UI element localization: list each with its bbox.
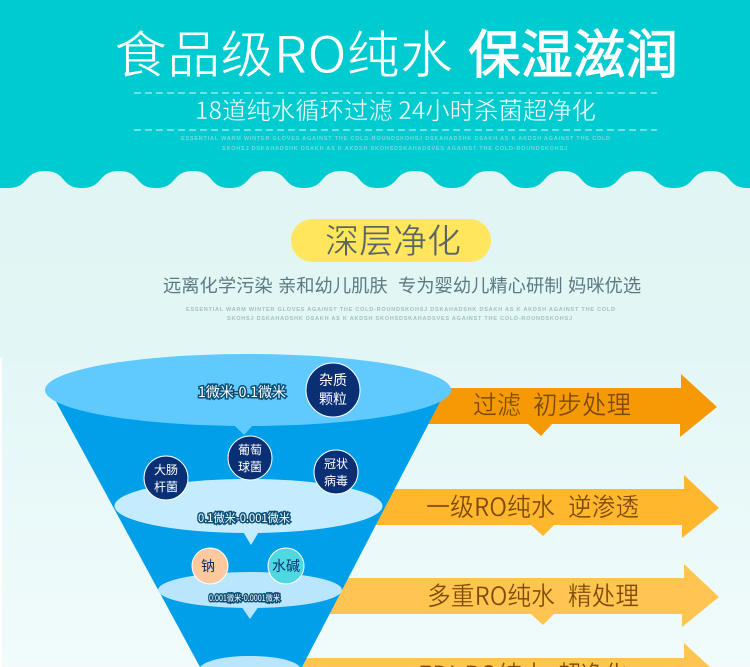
bubble: impurities: 颗粒 bbox=[319, 389, 347, 409]
title bbox=[114, 13, 678, 89]
bubble: staphylococcus: 球菌 bbox=[238, 458, 262, 475]
bubble: coronavirus: 病毒 bbox=[324, 472, 348, 489]
header fine print: ESSENTIAL WARM WINTER GLOVES AGAINST THE COLD-ROUNDSKOHSJ DSKAHADSHK DSAKH AS K AKDSH AGAINST THE COLD bbox=[181, 136, 610, 142]
section description: 远离化学污染 bbox=[163, 272, 273, 298]
arrow: filter step 3: 精处理 bbox=[568, 576, 639, 613]
arrow: filter step 1: 过滤 bbox=[473, 385, 521, 422]
bubble: limescale bbox=[268, 548, 304, 584]
arrow: filter step 3: 多重RO纯水 bbox=[427, 576, 555, 613]
funnel tier 2 ellipse bbox=[114, 479, 382, 545]
bubble: impurities bbox=[306, 363, 360, 417]
arrow: filter step 4 bbox=[290, 643, 710, 667]
bubble: e. coli: 大肠 bbox=[154, 461, 178, 478]
arrow: filter step 2 bbox=[370, 475, 719, 538]
bubble: coronavirus: 冠状 bbox=[324, 455, 348, 472]
header fine print bbox=[181, 136, 610, 152]
section fine print: SKOHSJ DSKAHADSHK DSAKH AS K AKDSH SKOHSDSKAHADSVES AGAINST THE COLD-ROUNDSKOHSJ bbox=[227, 316, 572, 322]
tier label: 0.1 to 0.001 micron: 0.1微米-0.001微米 bbox=[198, 510, 290, 526]
bubble: e. coli bbox=[144, 456, 188, 500]
funnel bbox=[45, 354, 451, 667]
bubble: e. coli: 杆菌 bbox=[154, 478, 178, 495]
arrow: filter step 2: 一级RO纯水 bbox=[426, 487, 555, 524]
arrow: filter step 1 bbox=[420, 374, 717, 437]
bubble: staphylococcus bbox=[228, 436, 272, 480]
section heading pill bbox=[291, 214, 491, 263]
arrow: filter step 2: 逆渗透 bbox=[568, 487, 639, 524]
bubble: coronavirus bbox=[314, 450, 358, 494]
bubble: sodium bbox=[192, 548, 228, 584]
header wave banner bbox=[0, 0, 750, 188]
bubble: sodium: 钠 bbox=[201, 556, 215, 576]
bubble: staphylococcus: 葡萄 bbox=[238, 441, 262, 458]
funnel tier 3 ellipse bbox=[158, 572, 342, 619]
funnel body bbox=[54, 398, 442, 667]
bubble: limescale: 水碱 bbox=[272, 556, 300, 576]
section heading pill: 深层净化 bbox=[325, 214, 461, 263]
tier label: 0.001 to 0.0001 micron: 0.001微米-0.0001微米 bbox=[209, 592, 280, 604]
bubble: impurities: 杂质 bbox=[319, 370, 347, 390]
header fine print: SKOHSJ DSKAHADSHK DSAKH AS K AKDSH SKOHSDSKAHADSVES AGAINST THE COLD-ROUNDSKOHSJ bbox=[222, 146, 567, 152]
section fine print bbox=[186, 307, 615, 322]
subtitle with dashed rules: 18道纯水循环过滤 24小时杀菌超净化 bbox=[195, 91, 596, 126]
section description: 专为婴幼儿精心研制 bbox=[398, 272, 563, 298]
arrow: filter step 3 bbox=[320, 564, 719, 627]
funnel tier 4 ellipse bbox=[200, 656, 300, 667]
title: 保湿滋润 bbox=[468, 13, 678, 89]
arrow: filter step 1: 初步处理 bbox=[533, 385, 631, 422]
tier label: 1 to 0.1 micron: 1微米-0.1微米 bbox=[198, 382, 286, 402]
section fine print: ESSENTIAL WARM WINTER GLOVES AGAINST THE COLD-ROUNDSKOHSJ DSKAHADSHK DSAKH AS K AKDSH AGAINST THE COLD bbox=[186, 307, 615, 313]
funnel tier 1 ellipse bbox=[45, 354, 451, 435]
section description: 亲和幼儿肌肤 bbox=[278, 272, 388, 298]
section description: 妈咪优选 bbox=[568, 272, 641, 298]
title: 食品级RO纯水 bbox=[114, 14, 453, 88]
